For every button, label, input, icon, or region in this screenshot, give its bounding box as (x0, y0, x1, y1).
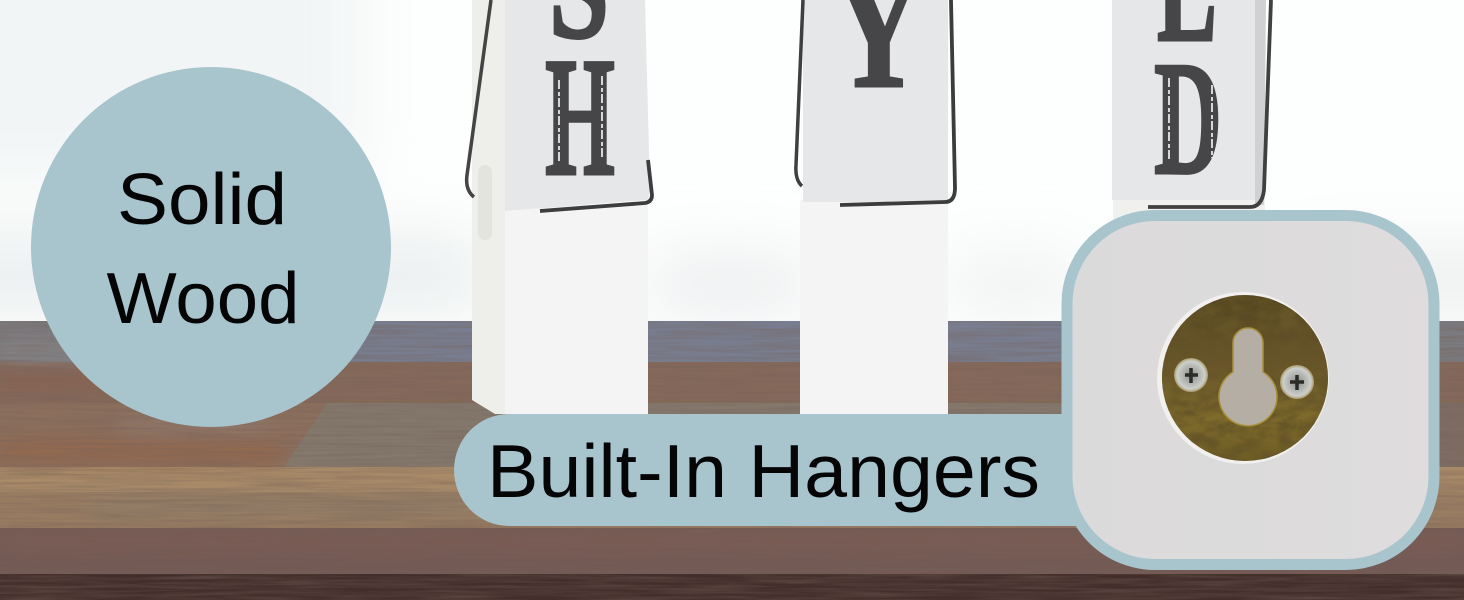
stamped letter H: H (545, 23, 615, 211)
label: Built-In Hangers: Built-In Hangers (487, 429, 1040, 513)
keyhole slot (1219, 328, 1277, 426)
clothespin: Y (796, 0, 955, 414)
stamped letter D: D (1154, 29, 1222, 209)
blurred window background (0, 0, 1464, 322)
wooden table top (0, 321, 1464, 600)
right screw (1280, 365, 1314, 399)
badge: Solid Wood: Wood (106, 259, 300, 339)
label: Built-In Hangers (454, 414, 1100, 526)
badge: Solid Wood (31, 67, 391, 427)
inset: keyhole hanger close-up (1067, 216, 1434, 564)
clothespin: L D (1112, 0, 1271, 226)
clothespin: S H (467, 0, 652, 414)
brass hanger plate (1157, 292, 1330, 464)
left screw (1174, 358, 1208, 392)
badge: Solid Wood: Solid (117, 160, 287, 240)
